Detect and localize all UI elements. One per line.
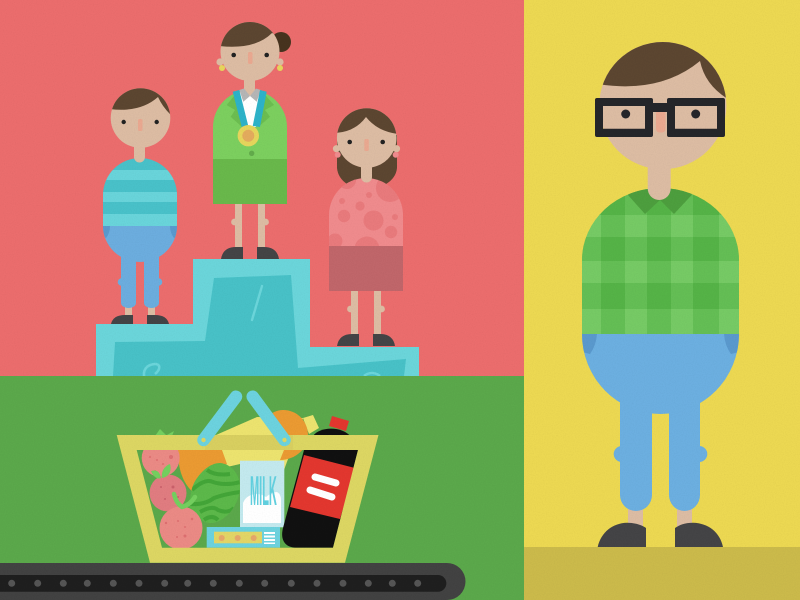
figure: woman in pink dress: [329, 108, 403, 346]
boy face: [122, 119, 159, 131]
ears: [216, 58, 284, 66]
boy shoes: [111, 315, 169, 324]
neck: [648, 160, 671, 200]
boy ankles: [125, 300, 155, 317]
boy torso: [103, 158, 177, 262]
woman legs: [231, 200, 269, 250]
earrings: [219, 65, 283, 71]
ankles: [628, 505, 692, 527]
shoes: [598, 523, 723, 547]
conveyor belt: [0, 563, 466, 600]
neck: [244, 75, 255, 96]
panel: red podium background: [0, 0, 524, 376]
boy legs: [118, 245, 162, 308]
milk carton: MILK: [250, 468, 277, 515]
eyes: [621, 110, 700, 118]
panel: green basket background: [0, 376, 524, 600]
ears and earrings: [333, 145, 400, 158]
hair: [602, 42, 726, 98]
legs: [614, 390, 707, 511]
medal ribbon: [233, 90, 267, 127]
panel: yellow background: [524, 0, 800, 600]
collar: [628, 188, 692, 214]
basket frame: [117, 435, 378, 563]
boy head: [111, 88, 170, 148]
nose: [656, 105, 666, 132]
orange fruit right: [266, 410, 308, 460]
cola bottle: [282, 429, 358, 548]
boy neck: [134, 140, 145, 162]
figure: man with glasses: [580, 38, 742, 547]
boy hair: [112, 88, 170, 114]
dress top: [329, 178, 403, 246]
woman shoes: [221, 247, 279, 259]
woman bun: [271, 32, 291, 52]
cereal box: [207, 527, 280, 548]
podium: [96, 259, 419, 376]
figure: woman in green suit with gold medal: [213, 15, 291, 259]
button: [249, 151, 254, 156]
tomato top: [142, 439, 180, 477]
glasses: [595, 98, 725, 137]
face: [347, 139, 385, 151]
woman hair: [221, 22, 274, 47]
bottle cap: [303, 415, 319, 434]
legs: [347, 288, 385, 338]
yellow bottle: [216, 417, 303, 470]
pants: [580, 334, 742, 416]
collar: [239, 88, 261, 102]
woman skirt: [213, 159, 287, 204]
neck: [361, 160, 372, 183]
figure: boy in striped sweater: [103, 88, 177, 324]
rim shade: [205, 435, 293, 450]
tomato bottom: [160, 494, 202, 550]
head: [599, 42, 726, 169]
skirt: [329, 246, 403, 291]
melon: [189, 463, 240, 523]
strawberry top leaves: [155, 429, 174, 436]
back hair: [337, 135, 397, 184]
orange fruit left: [178, 450, 227, 491]
shirt: [237, 92, 263, 127]
handles: [201, 397, 287, 442]
medal: [238, 125, 259, 146]
woman face: [231, 52, 269, 64]
bottle cap red: [329, 416, 349, 431]
fringe: [337, 108, 396, 134]
floor: [524, 547, 800, 600]
tomato middle: [150, 464, 186, 512]
shopping basket with groceries: [117, 397, 378, 563]
milk carton: [240, 461, 284, 527]
shoes: [337, 334, 395, 346]
head: [337, 108, 397, 168]
woman head: [220, 22, 280, 81]
lapels: [227, 94, 274, 127]
woman jacket: [213, 90, 287, 160]
plaid shirt: [580, 186, 742, 336]
